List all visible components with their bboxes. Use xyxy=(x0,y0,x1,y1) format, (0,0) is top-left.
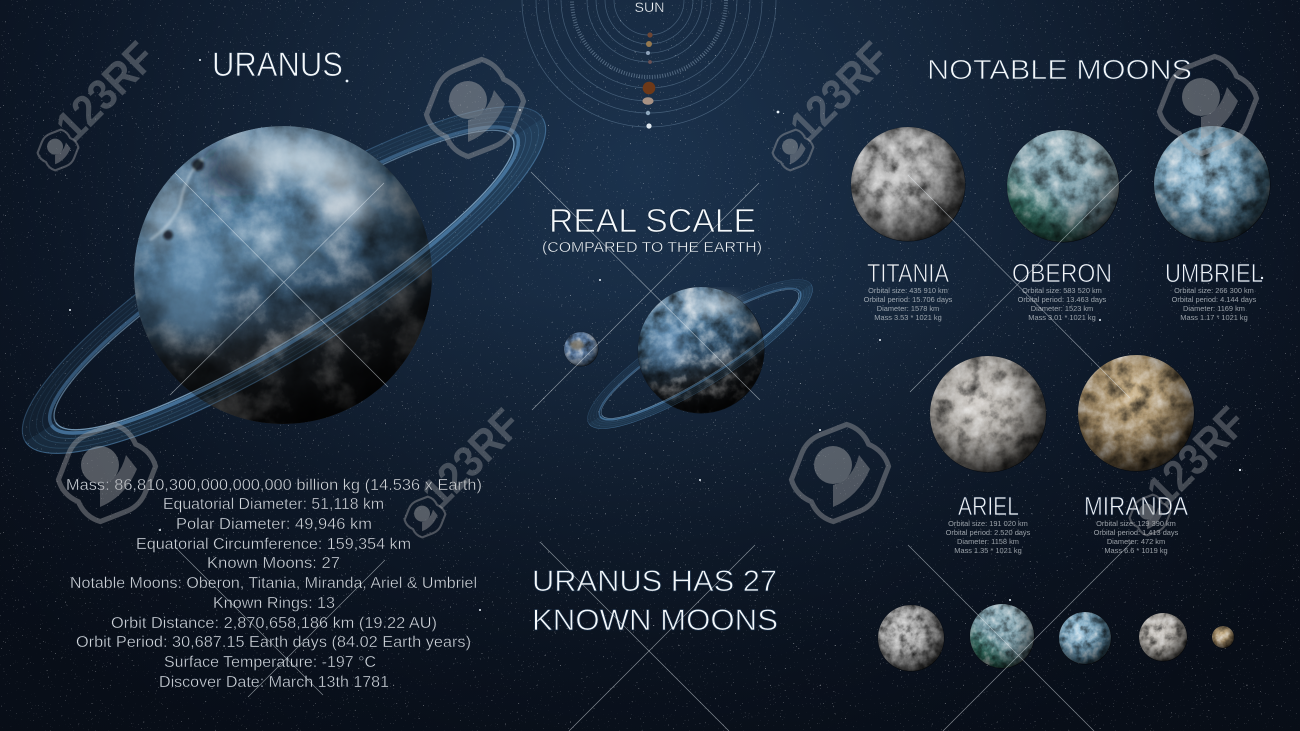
watermark: egg icons xyxy=(45,43,1270,535)
text block: oberon: Orbital size: 583 520 km xyxy=(1022,286,1102,295)
text block: ariel: ARIEL xyxy=(958,491,1019,521)
large uranus with rings xyxy=(22,106,546,454)
moon: oberon xyxy=(1006,130,1120,242)
text block: oberon: OBERON xyxy=(1012,258,1112,288)
facts list: Orbit Distance: 2,870,658,186 km (19.22 AU) xyxy=(111,615,437,632)
facts list: Surface Temperature: -197 °C xyxy=(164,654,376,671)
text block: titania: Orbital period: 15.706 days xyxy=(864,295,953,304)
moon: umbriel xyxy=(1154,126,1270,242)
text block: miranda xyxy=(1084,491,1189,555)
heading: uranus has 27 known moons: KNOWN MOONS xyxy=(532,604,778,637)
watermark: 123RF top left xyxy=(32,33,165,176)
text block: titania xyxy=(864,258,953,322)
text block: oberon: Orbital period: 13.463 days xyxy=(1018,295,1107,304)
solar system diagram xyxy=(522,0,776,129)
heading: uranus has 27 known moons xyxy=(532,565,778,637)
heading: uranus has 27 known moons: URANUS HAS 27 xyxy=(532,565,777,598)
text block: miranda: MIRANDA xyxy=(1084,491,1189,521)
heading: notable moons: NOTABLE MOONS xyxy=(927,54,1192,85)
facts list: Discover Date: March 13th 1781 xyxy=(159,674,389,691)
text block: umbriel: Diameter: 1169 km xyxy=(1183,304,1245,313)
facts list: Equatorial Diameter: 51,118 km xyxy=(163,496,384,513)
text block: titania: Orbital size: 435 910 km xyxy=(868,286,948,295)
real scale: earth xyxy=(564,332,598,366)
facts list: Equatorial Circumference: 159,354 km xyxy=(136,536,411,553)
text block: titania: Diameter: 1578 km xyxy=(877,304,939,313)
moon: titania xyxy=(850,126,966,242)
facts list: Orbit Period: 30,687.15 Earth days (84.02 Earth years) xyxy=(76,634,471,651)
text block: umbriel: Orbital size: 266 300 km xyxy=(1174,286,1254,295)
text block: oberon: Mass 3.01 * 1021 kg xyxy=(1028,313,1096,322)
watermark: 123RF top centre right: 123RF xyxy=(781,33,899,151)
watermark: 123RF lower centre: 123RF xyxy=(413,400,531,518)
text block: ariel: Orbital size: 191 020 km xyxy=(948,519,1028,528)
heading: real scale: REAL SCALE xyxy=(549,202,756,239)
moon: ariel xyxy=(930,356,1046,472)
text block: umbriel: Orbital period: 4.144 days xyxy=(1172,295,1257,304)
facts list: Known Rings: 13 xyxy=(213,595,335,612)
moons size comparison row xyxy=(878,604,1234,672)
text block: ariel: Orbital period: 2.520 days xyxy=(946,528,1031,537)
facts list: Mass: 86,810,300,000,000,000 billion kg (14.536 x Earth) xyxy=(66,477,482,494)
facts list: Known Moons: 27 xyxy=(207,555,340,572)
text block: miranda: Orbital size: 129 390 km xyxy=(1096,519,1176,528)
text block: miranda: Diameter: 472 km xyxy=(1107,537,1165,546)
text block: ariel: Diameter: 1158 km xyxy=(957,537,1019,546)
moon: miranda xyxy=(1078,354,1194,472)
text block: umbriel: UMBRIEL xyxy=(1165,258,1263,288)
text block: oberon xyxy=(1012,258,1112,322)
watermark: 123RF lower centre xyxy=(399,400,531,543)
text block: umbriel xyxy=(1165,258,1263,322)
facts list: Notable Moons: Oberon, Titania, Miranda, Ariel & Umbriel xyxy=(70,575,477,592)
text block: miranda: Orbital period: 1.413 days xyxy=(1094,528,1179,537)
real scale: uranus with rings xyxy=(587,279,813,429)
heading: uranus: URANUS xyxy=(212,46,343,84)
watermark: 123RF top centre right xyxy=(767,33,899,176)
text block: ariel xyxy=(946,491,1031,555)
subheading: compared to the earth: (COMPARED TO THE EARTH) xyxy=(542,239,762,256)
facts list: Polar Diameter: 49,946 km xyxy=(176,516,372,533)
watermark: 123RF lower right xyxy=(1124,398,1256,541)
text block: titania: TITANIA xyxy=(867,258,950,288)
planet markers xyxy=(642,32,655,129)
text block: miranda: Mass 6.6 * 1019 kg xyxy=(1104,546,1168,555)
facts list xyxy=(66,477,482,691)
watermark: 123RF lower right: 123RF xyxy=(1138,398,1256,516)
text block: oberon: Diameter: 1523 km xyxy=(1031,304,1093,313)
text block: umbriel: Mass 1.17 * 1021 kg xyxy=(1180,313,1248,322)
watermark: 123RF top left: 123RF xyxy=(47,33,165,151)
text block: titania: Mass 3.53 * 1021 kg xyxy=(874,313,942,322)
text block: ariel: Mass 1.35 * 1021 kg xyxy=(954,546,1022,555)
